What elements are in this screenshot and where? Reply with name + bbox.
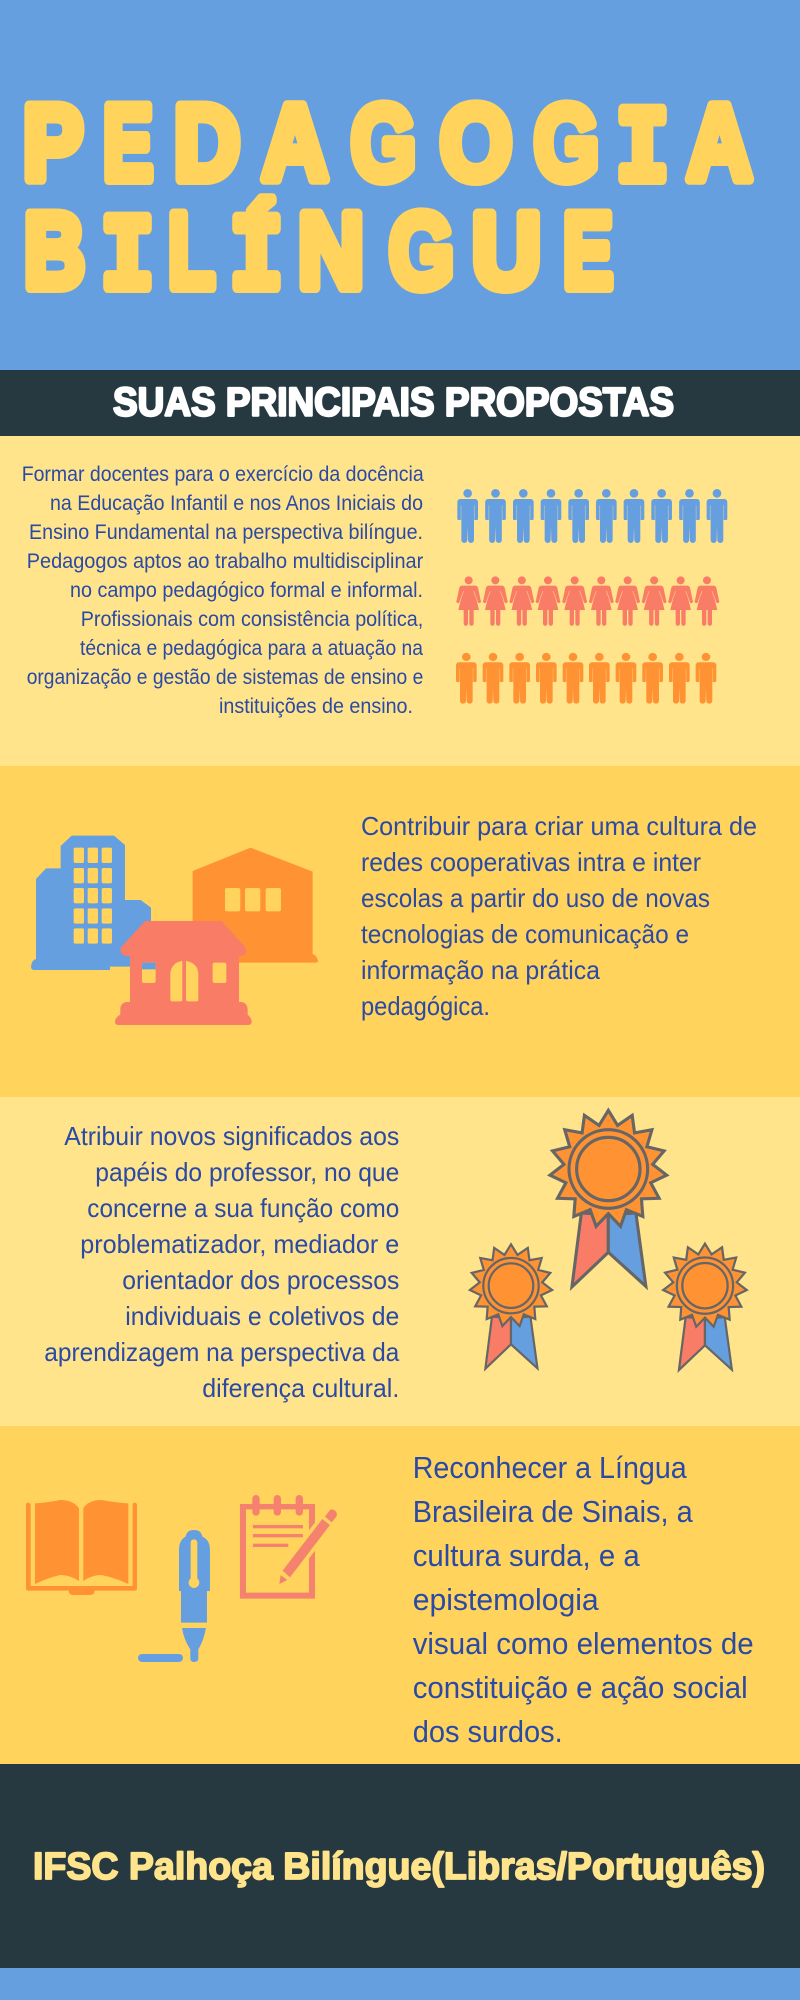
text block: formar docentes bbox=[22, 463, 424, 718]
icon row: blue men bbox=[457, 489, 727, 543]
icon row: orange men bbox=[456, 653, 716, 704]
text block: formar docentes: na Educação Infantil e nos Anos Iniciais do bbox=[50, 492, 423, 515]
text block: formar docentes: Pedagogos aptos ao trabalho multidisciplinar bbox=[27, 550, 423, 573]
text block: papéis do professor: papéis do professor, no que bbox=[95, 1157, 399, 1187]
title: I bbox=[616, 92, 669, 212]
panel: língua brasileira de sinais bbox=[0, 1426, 800, 1764]
title: N bbox=[298, 190, 364, 310]
panel: title header bbox=[0, 0, 800, 370]
text block: língua brasileira de sinais: epistemologia bbox=[413, 1582, 599, 1617]
title: G bbox=[351, 82, 416, 202]
text block: papéis do professor: concerne a sua função como bbox=[87, 1193, 399, 1223]
icon: book, pen and notepad bbox=[26, 1495, 337, 1662]
heading: suas principais propostas: SUAS PRINCIPAIS PROPOSTAS bbox=[113, 380, 674, 424]
icon: three award medals bbox=[470, 1110, 747, 1370]
title: P bbox=[23, 82, 83, 202]
title: A bbox=[687, 82, 752, 202]
text block: língua brasileira de sinais: visual como elementos de bbox=[413, 1626, 754, 1661]
text block: papéis do professor: individuais e coletivos de bbox=[125, 1301, 399, 1331]
text block: língua brasileira de sinais: Reconhecer a Língua bbox=[413, 1450, 687, 1485]
icon: large medal bbox=[550, 1110, 667, 1287]
icon: red house bbox=[115, 921, 252, 1025]
title: D bbox=[174, 82, 240, 202]
panel: redes cooperativas bbox=[0, 766, 800, 1097]
text block: redes cooperativas: pedagógica. bbox=[361, 991, 490, 1021]
icon: notepad with pencil bbox=[240, 1495, 337, 1599]
text block: redes cooperativas: tecnologias de comunicação e bbox=[361, 919, 689, 949]
text block: papéis do professor: Atribuir novos significados aos bbox=[64, 1121, 399, 1151]
text block: língua brasileira de sinais: cultura surda, e a bbox=[413, 1538, 640, 1573]
bottom blue strip bbox=[0, 1968, 800, 2000]
text block: formar docentes: Profissionais com consistência política, bbox=[81, 608, 423, 631]
text block: formar docentes: Formar docentes para o exercício da docência bbox=[22, 463, 424, 486]
text block: formar docentes: organização e gestão de sistemas de ensino e bbox=[27, 666, 423, 689]
icon row: red women bbox=[456, 576, 719, 626]
title: I bbox=[101, 200, 154, 320]
panel: papéis do professor bbox=[0, 1097, 800, 1426]
icon: fountain pen bbox=[138, 1530, 210, 1662]
text block: formar docentes: técnica e pedagógica para a atuação na bbox=[80, 637, 423, 660]
text block: papéis do professor: problematizador, mediador e bbox=[80, 1229, 399, 1259]
panel: formar docentes bbox=[0, 436, 800, 766]
title: L bbox=[168, 190, 215, 310]
icon: orange warehouse bbox=[193, 848, 318, 963]
title: E bbox=[563, 190, 613, 310]
title: Í bbox=[230, 198, 283, 320]
text block: língua brasileira de sinais: constituição e ação social bbox=[413, 1670, 748, 1705]
icon: blue office building bbox=[31, 836, 151, 970]
title: A bbox=[262, 82, 328, 202]
panel: footer band bbox=[0, 1764, 800, 1968]
panel: subtitle band bbox=[0, 370, 800, 436]
text block: língua brasileira de sinais: dos surdos. bbox=[413, 1714, 563, 1749]
footer text: IFSC Palhoça Bilíngue(Libras/Português) bbox=[33, 1846, 765, 1888]
text block: língua brasileira de sinais: Brasileira de Sinais, a bbox=[413, 1494, 693, 1529]
icon: school buildings bbox=[31, 836, 318, 1025]
text block: papéis do professor: diferença cultural. bbox=[202, 1373, 399, 1403]
title: U bbox=[472, 190, 541, 310]
title: O bbox=[440, 82, 512, 202]
title: B bbox=[24, 190, 85, 310]
title: G bbox=[534, 82, 599, 202]
icon: right medal bbox=[663, 1244, 747, 1370]
title: G bbox=[389, 190, 454, 310]
text block: papéis do professor: aprendizagem na perspectiva da bbox=[44, 1337, 400, 1367]
title bbox=[23, 82, 752, 320]
icon: left medal bbox=[470, 1244, 552, 1369]
icon: open book bbox=[26, 1500, 137, 1595]
text block: redes cooperativas: redes cooperativas intra e inter bbox=[361, 847, 701, 877]
title: E bbox=[103, 82, 153, 202]
text block: redes cooperativas: Contribuir para criar uma cultura de bbox=[361, 811, 757, 841]
text block: redes cooperativas: informação na prática bbox=[361, 955, 601, 985]
text block: formar docentes: no campo pedagógico formal e informal. bbox=[70, 579, 423, 602]
text block: formar docentes: Ensino Fundamental na perspectiva bilíngue. bbox=[29, 521, 423, 544]
text block: redes cooperativas bbox=[361, 811, 757, 1021]
text block: língua brasileira de sinais bbox=[413, 1450, 754, 1749]
text block: redes cooperativas: escolas a partir do uso de novas bbox=[361, 883, 710, 913]
text block: formar docentes: instituições de ensino. bbox=[219, 695, 413, 718]
text block: papéis do professor bbox=[44, 1121, 400, 1403]
text block: papéis do professor: orientador dos processos bbox=[122, 1265, 399, 1295]
